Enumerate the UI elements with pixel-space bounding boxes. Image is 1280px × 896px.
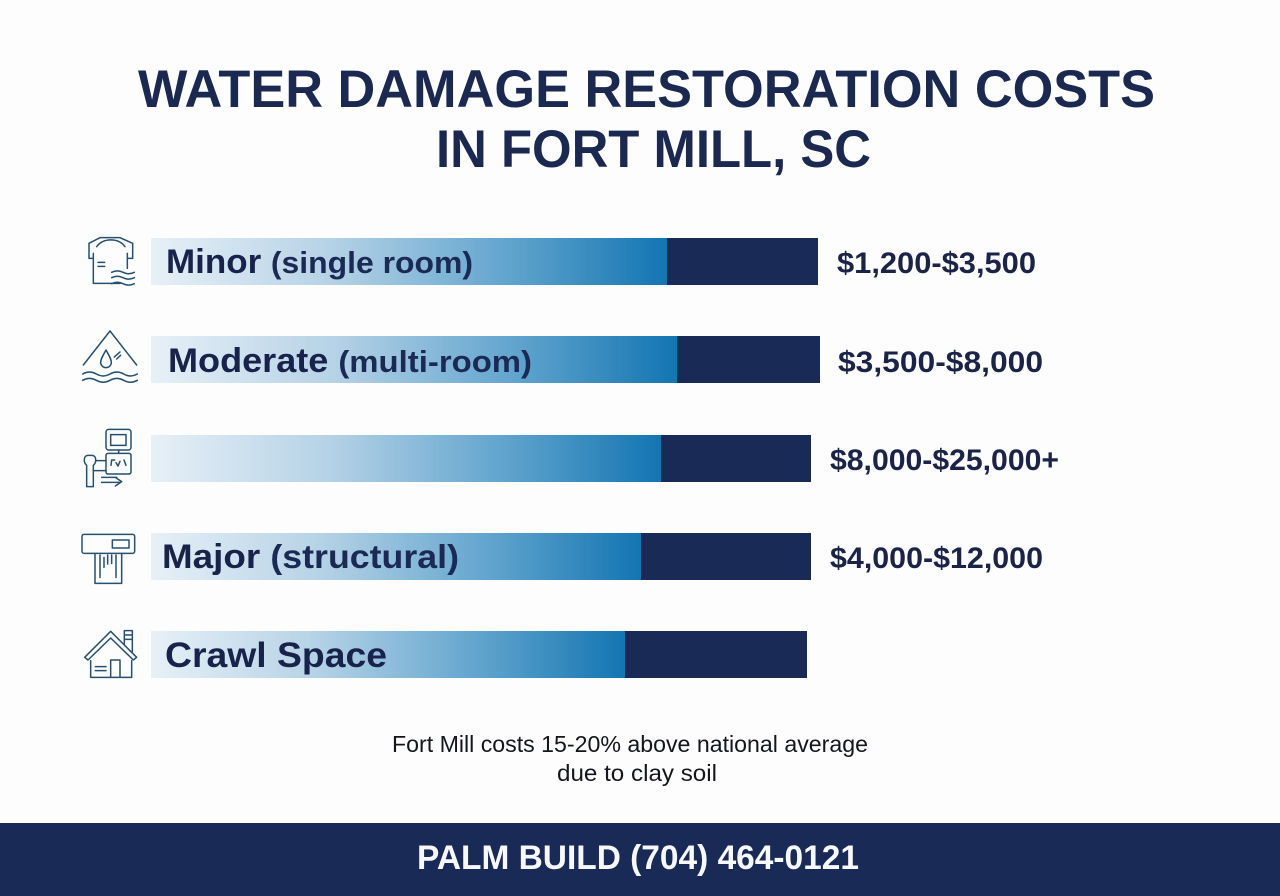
price: unlabeled: $8,000-$25,000+	[830, 444, 1059, 477]
title: WATER DAMAGE RESTORATION COSTS	[138, 60, 1155, 119]
price: moderate: $3,500-$8,000	[838, 346, 1043, 379]
row: major	[82, 533, 1043, 583]
row: crawl space	[85, 631, 807, 678]
bar: crawl space	[151, 631, 807, 678]
bar: unlabeled	[151, 435, 811, 482]
label: minor: Minor (single room)	[166, 243, 473, 281]
bar: major	[151, 533, 811, 580]
label: major: Major (structural)	[162, 538, 459, 576]
bar: minor	[151, 238, 818, 285]
row: minor	[89, 238, 1036, 285]
title	[138, 60, 1155, 179]
title: IN FORT MILL, SC	[436, 120, 871, 179]
row: unlabeled equipment	[84, 429, 1059, 487]
icon: flooded room	[89, 238, 134, 285]
footer contact text: PALM BUILD (704) 464-0121	[417, 839, 859, 877]
icon: house	[85, 631, 137, 677]
footer band	[0, 823, 1280, 896]
label: crawl space: Crawl Space	[165, 636, 387, 675]
icon: water hazard triangle	[83, 331, 137, 382]
row: moderate	[83, 331, 1043, 383]
price: major: $4,000-$12,000	[830, 542, 1043, 575]
footnote: due to clay soil	[557, 760, 717, 786]
label: moderate: Moderate (multi-room)	[168, 342, 532, 380]
footnote: Fort Mill costs 15-20% above national average	[392, 731, 868, 757]
icon: drying equipment	[84, 429, 131, 487]
footnote	[392, 731, 868, 786]
price: minor: $1,200-$3,500	[837, 247, 1036, 280]
bar: moderate	[151, 336, 820, 383]
icon: structural unit	[82, 534, 135, 583]
